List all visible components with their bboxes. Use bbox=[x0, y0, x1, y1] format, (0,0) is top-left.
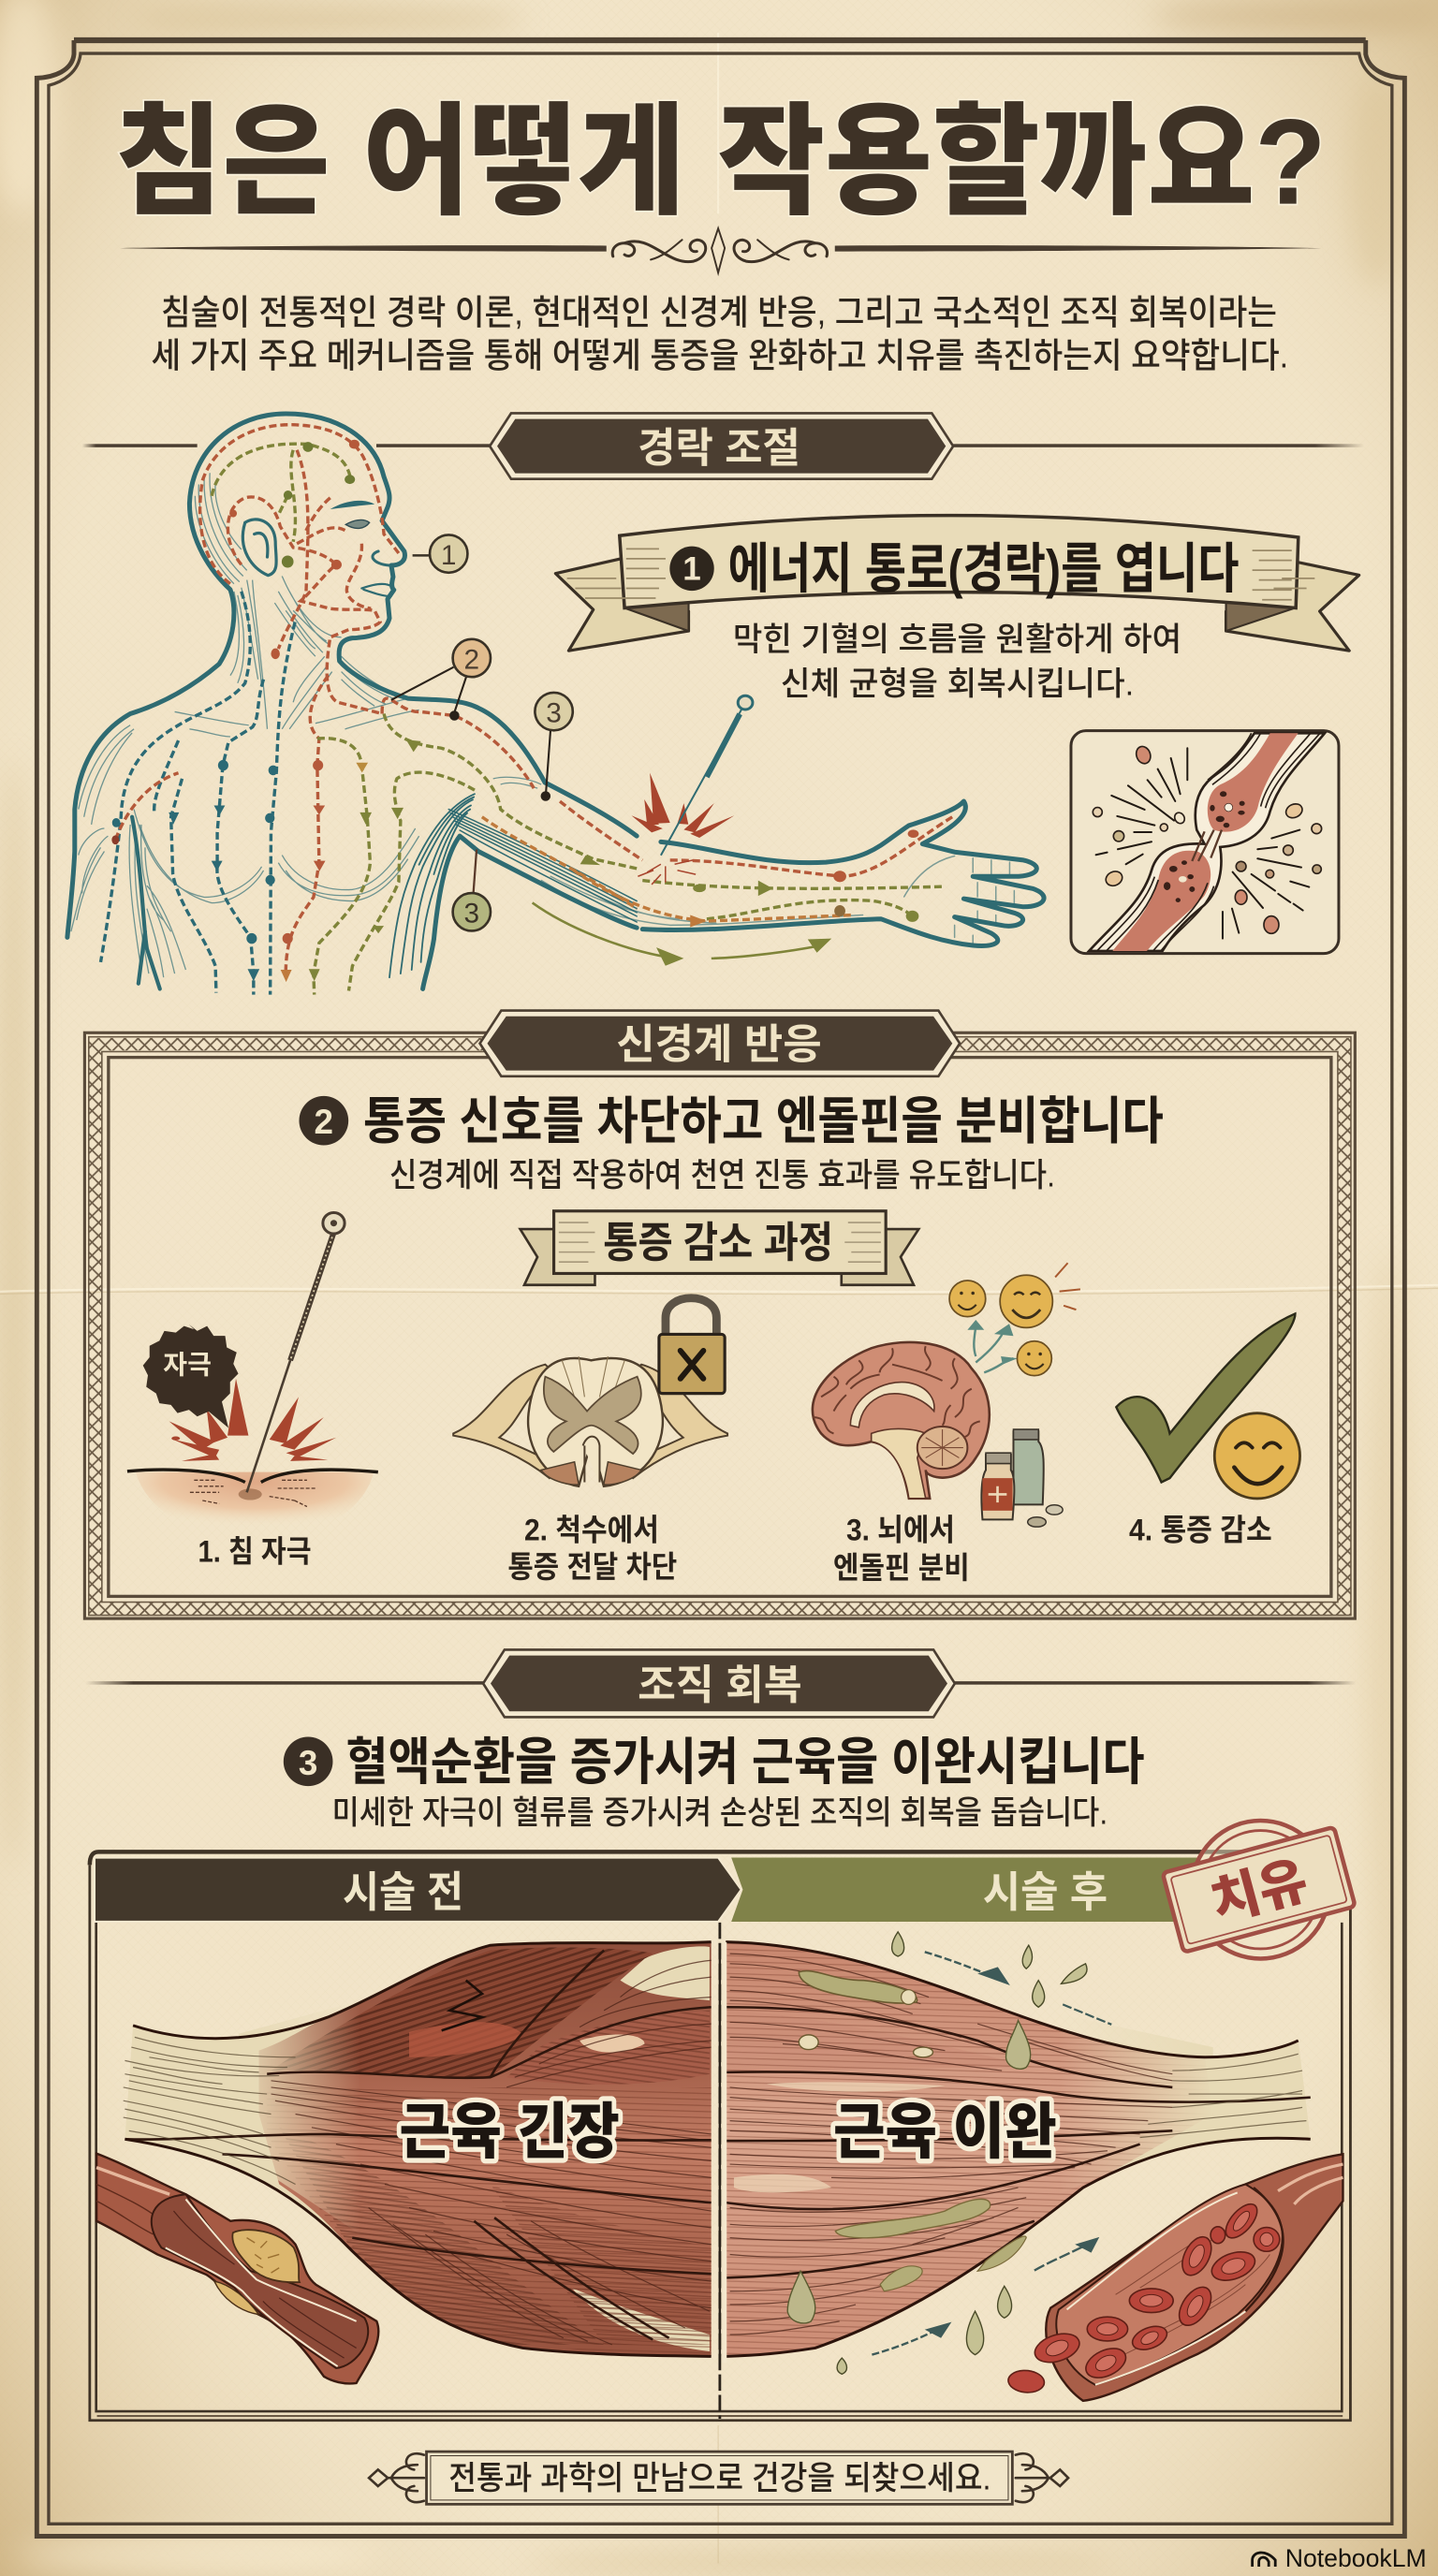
grey matter bbox=[544, 1377, 641, 1454]
vessel: narrowed (before) bbox=[96, 2154, 378, 2383]
tendon fade into muscle bbox=[239, 2000, 360, 2234]
skin bbox=[136, 1472, 374, 1539]
step 3 label bbox=[833, 1514, 970, 1585]
intro paragraph bbox=[151, 294, 1288, 374]
yellow deposits bbox=[799, 1971, 917, 2003]
panel: before and after bbox=[90, 1821, 1356, 2421]
plaque bbox=[232, 2230, 300, 2282]
head and torso (traced) bbox=[67, 414, 637, 995]
step 2 line 2: 통증 전달 차단 bbox=[507, 1550, 677, 1584]
section 1 description bbox=[733, 622, 1181, 703]
arm hatching bbox=[541, 856, 1014, 944]
section heading plaque: 신경계 반응 bbox=[480, 1011, 960, 1076]
step 2 line 1: 2. 척수에서 bbox=[524, 1514, 659, 1547]
panel heading: 통증 신호를 차단하고 엔돌핀을 분비합니다 bbox=[363, 1093, 1164, 1150]
banner: section 1 heading ribbon: 에너지 통로(경락)를 엽니다 bbox=[728, 540, 1240, 600]
arrows to smiley faces bbox=[974, 1324, 1013, 1372]
step 3 line 2: 엔돌핀 분비 bbox=[833, 1551, 970, 1585]
muscle: tense (before) bbox=[124, 1942, 712, 2356]
smiley large bbox=[1000, 1275, 1052, 1327]
section heading plaque: 신경계 반응: 신경계 반응 bbox=[616, 1022, 822, 1068]
stamp: healing bbox=[1163, 1821, 1356, 1958]
footer message: 전통과 과학의 만남으로 건강을 되찾으세요. bbox=[448, 2460, 991, 2496]
intro line 1: 침술이 전통적인 경락 이론, 현대적인 신경계 반응, 그리고 국소적인 조직 회복이라는 bbox=[161, 294, 1277, 332]
banner: section 1 heading ribbon bbox=[555, 516, 1359, 651]
icon: acupuncture needle with burst on arm bbox=[632, 695, 753, 885]
section heading plaque: 경락 조절 bbox=[490, 413, 953, 479]
step 3 line 1: 3. 뇌에서 bbox=[846, 1514, 955, 1547]
number badge 2 bbox=[299, 1096, 348, 1146]
header: before bbox=[95, 1858, 741, 1922]
fibres bbox=[271, 2081, 712, 2345]
step 4 label: 4. 통증 감소 bbox=[1129, 1514, 1272, 1547]
title divider ornament bbox=[120, 228, 1321, 272]
label: relaxed muscle: 근육 이완 bbox=[833, 2098, 1057, 2166]
needle bbox=[290, 1233, 333, 1360]
step 2 label bbox=[507, 1514, 677, 1584]
red blood cells bbox=[1005, 2203, 1280, 2393]
step 1: needle stimulation bbox=[127, 1212, 378, 1569]
injured fibre tear bbox=[442, 1981, 482, 2030]
intro line 2: 세 가지 주요 메커니즘을 통해 어떻게 통증을 완화하고 치유를 촉진하는지 요약합니다. bbox=[151, 336, 1288, 374]
step 1 label: 1. 침 자극 bbox=[198, 1535, 312, 1569]
meridian lines on head and torso bbox=[100, 425, 637, 995]
ribbon: pain reduction process bbox=[521, 1211, 918, 1285]
stamp: healing: 치유 bbox=[1205, 1850, 1313, 1932]
header: after bbox=[731, 1858, 1199, 1922]
section 3 subheading: 미세한 자극이 혈류를 증가시켜 손상된 조직의 회복을 돕습니다. bbox=[332, 1795, 1108, 1832]
flow arrows below arm bbox=[533, 902, 831, 966]
callout 2: 2 bbox=[464, 644, 479, 675]
figure: human body with meridians bbox=[67, 414, 1044, 995]
inset: unblocked vessel bbox=[1071, 731, 1339, 954]
arm outline bbox=[642, 801, 1044, 945]
check mark bbox=[1116, 1313, 1295, 1482]
speech bubble bbox=[143, 1325, 239, 1427]
title: 침은 어떻게 작용할까요? bbox=[115, 94, 1327, 230]
smiley bbox=[1214, 1413, 1300, 1499]
bottles bbox=[1013, 1431, 1044, 1504]
tendon right bbox=[1075, 2041, 1311, 2188]
panel: nervous system response bbox=[84, 1011, 1355, 1618]
number badge 3: 3 bbox=[299, 1744, 317, 1782]
tendon left bbox=[125, 2017, 360, 2251]
smiley small 1 bbox=[949, 1281, 986, 1317]
droplets on muscle bbox=[1006, 2021, 1031, 2069]
muscle belly bbox=[726, 1942, 1213, 2356]
dashed centre divider bbox=[720, 1923, 725, 2419]
ribbon: pain reduction process: 통증 감소 과정 bbox=[603, 1219, 833, 1266]
vessel body bbox=[1089, 733, 1325, 951]
panel frame bbox=[84, 1032, 1355, 1618]
padlock bbox=[659, 1298, 725, 1394]
radiating lines and cells bbox=[1096, 748, 1309, 939]
footer message bbox=[369, 2452, 1068, 2504]
description line 2: 신체 균형을 회복시킵니다. bbox=[781, 666, 1134, 703]
arm and hand (traced) bbox=[533, 801, 1044, 966]
nerve roots bbox=[453, 1365, 558, 1478]
NotebookLM watermark: NotebookLM bbox=[1285, 2543, 1427, 2572]
vessel: open with red blood cells (after) bbox=[1005, 2154, 1343, 2401]
brain bbox=[813, 1342, 990, 1499]
muscle: relaxed (after) bbox=[726, 1942, 1311, 2356]
outline bbox=[726, 1942, 1299, 2057]
callout 3 upper bbox=[535, 693, 573, 801]
panel frame bbox=[90, 1852, 1350, 2421]
muscle belly bbox=[259, 1942, 712, 2356]
number badge 3 bbox=[284, 1736, 332, 1786]
section 1 rule bbox=[82, 444, 1364, 447]
number badge 2: 2 bbox=[315, 1103, 333, 1141]
label: tense muscle: 근육 긴장 bbox=[400, 2098, 620, 2166]
arm meridians bbox=[670, 815, 955, 876]
section heading plaque: 조직 회복: 조직 회복 bbox=[638, 1662, 802, 1708]
tendon fibres bbox=[1140, 2054, 1306, 2137]
burst bbox=[169, 1379, 336, 1461]
banner: section 1 heading ribbon: 1 bbox=[682, 551, 701, 588]
speech bubble: 자극 bbox=[163, 1351, 212, 1380]
meridian nodes bbox=[111, 440, 421, 982]
ear and face bbox=[242, 501, 392, 596]
header: before: 시술 전 bbox=[343, 1868, 463, 1916]
callout 1 bbox=[413, 534, 467, 573]
smiley small 2 bbox=[1017, 1341, 1051, 1376]
head and torso fine hatching bbox=[71, 473, 637, 977]
section 3 heading: 혈액순환을 증가시켜 근육을 이완시킵니다 bbox=[346, 1734, 1145, 1791]
callout 3 lower: 3 bbox=[464, 899, 479, 929]
callout 3 lower bbox=[453, 850, 491, 930]
tendon fade into muscle bbox=[1059, 2013, 1213, 2194]
section heading plaque: 경락 조절: 경락 조절 bbox=[638, 425, 800, 471]
outline bbox=[133, 1942, 712, 2039]
body outline bbox=[286, 414, 637, 836]
tendon fibres bbox=[124, 2037, 296, 2184]
step 2: spinal cord block bbox=[453, 1298, 727, 1584]
section 3 rule bbox=[85, 1681, 1356, 1685]
section heading plaque: 조직 회복 bbox=[483, 1649, 955, 1717]
white matter bbox=[528, 1358, 663, 1486]
header: after: 시술 후 bbox=[983, 1868, 1108, 1916]
description line 1: 막힌 기혈의 흐름을 원활하게 하여 bbox=[733, 622, 1181, 658]
callout 2 bbox=[391, 639, 491, 721]
flow droplets and arrows bbox=[837, 1932, 1111, 2374]
footer swirls bbox=[369, 2453, 1068, 2502]
fibres bbox=[730, 1954, 1172, 2334]
panel subheading: 신경계에 직접 작용하여 천연 진통 효과를 유도합니다. bbox=[389, 1157, 1055, 1193]
step 4: pain reduced bbox=[1116, 1313, 1300, 1547]
callout 1: 1 bbox=[441, 540, 457, 571]
callout 3 upper: 3 bbox=[546, 698, 562, 729]
step 3: brain releases endorphin bbox=[813, 1263, 1080, 1585]
